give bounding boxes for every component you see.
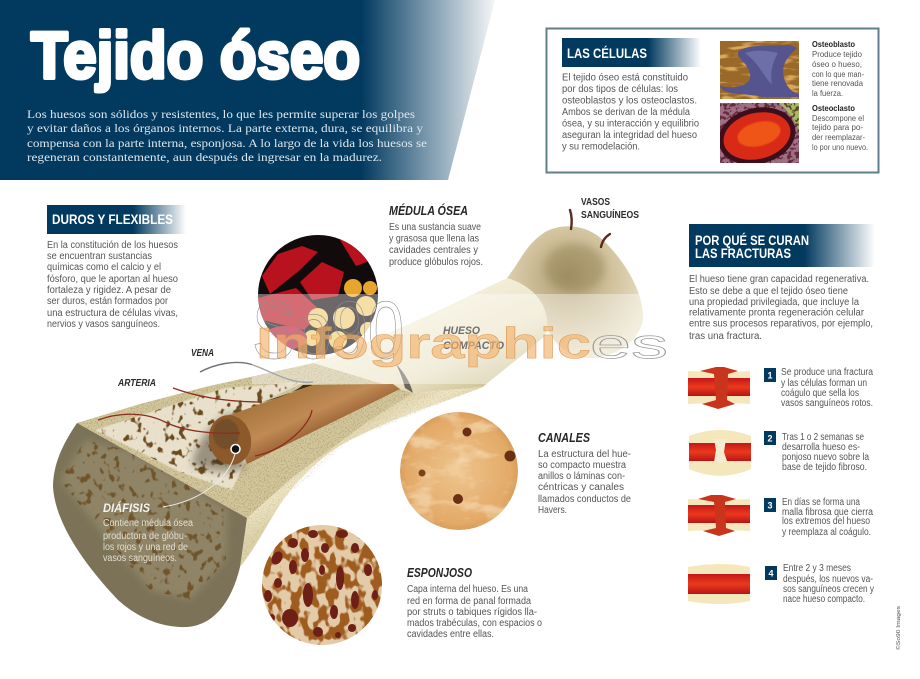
text: osteoclasto: Osteoclasto xyxy=(812,104,855,113)
intro text: Los huesos son sólidos y resistentes, lo que les permite superar los golpes xyxy=(27,109,416,121)
text 4 xyxy=(783,563,874,605)
step 3 xyxy=(688,495,873,538)
image: canales circle xyxy=(400,412,518,530)
callout diáfisis xyxy=(163,444,240,507)
vena xyxy=(200,362,313,382)
text: osteoblasto: la fuerza. xyxy=(812,89,843,98)
number 1 xyxy=(764,368,776,382)
text 1: y las células forman un xyxy=(781,378,867,389)
text: células xyxy=(562,72,700,152)
vasos sanguíneos xyxy=(570,210,610,247)
intro text: y evitar daños a los órganos internos. La parte externa, dura, se equilibra y xyxy=(27,123,423,135)
translucent band xyxy=(252,294,644,384)
watermark: es xyxy=(590,320,668,367)
intro text xyxy=(27,109,427,164)
text: fracturas: entre sus procesos reparativos, por ejemplo, xyxy=(689,318,873,330)
label: diáfisis xyxy=(103,500,193,564)
text 4: sos sanguíneos crecen y xyxy=(783,584,874,595)
text: células: Ambos se derivan de la médula xyxy=(562,107,691,118)
label: hueso compacto xyxy=(443,325,504,352)
label: esponjoso: Capa interna del hueso. Es una xyxy=(407,584,528,595)
text 3: y reemplaza al coágulo. xyxy=(782,527,871,538)
label: canales: Havers. xyxy=(538,505,567,516)
label: médula ósea: produce glóbulos rojos. xyxy=(389,257,483,268)
text: fracturas: El hueso tiene gran capacidad regenerativa. xyxy=(689,274,869,285)
text 1: vasos sanguíneos rotos. xyxy=(781,398,873,409)
dark gap xyxy=(263,385,313,402)
label: esponjoso: mados trabéculas, con espacios o xyxy=(407,618,542,629)
text 1 xyxy=(781,367,873,409)
text: osteoclasto xyxy=(812,104,868,152)
text: fracturas: relativamente pronta regeneración celular xyxy=(689,308,865,318)
label: arteria: ARTERIA xyxy=(117,378,156,389)
heading: fracturas: POR QUÉ SE CURAN xyxy=(695,232,809,248)
label: médula ósea: MÉDULA ÓSEA xyxy=(389,203,468,218)
image: osteoclasto xyxy=(720,103,799,163)
icon: fracture 1 xyxy=(688,367,750,409)
number 3 xyxy=(764,498,776,512)
text: osteoclasto: der reemplazar- xyxy=(812,133,865,142)
curled bone fold xyxy=(396,364,413,393)
icon: fracture 4 xyxy=(688,564,750,604)
text: células: y su remodelación. xyxy=(562,142,640,152)
label: vasos sanguíneos: VASOS xyxy=(581,197,610,208)
step 1 xyxy=(688,367,873,409)
number 3: 3 xyxy=(767,500,773,510)
text: duros y flexibles: ser duros, están formados por xyxy=(47,296,169,307)
number 4 xyxy=(765,566,777,580)
text: osteoblasto: Produce tejido xyxy=(812,50,863,59)
text 3 xyxy=(782,497,873,538)
label: vena: VENA xyxy=(191,348,214,359)
label: canales: llamados conductos de xyxy=(538,494,632,505)
label: hueso compacto: HUESO xyxy=(443,325,480,337)
cut face xyxy=(53,423,247,627)
label: canales xyxy=(538,430,632,516)
text: duros y flexibles: fortaleza y rigidez. A pesar de xyxy=(47,285,172,296)
text: osteoblasto: Osteoblasto xyxy=(812,40,855,49)
text: fracturas: una propiedad privilegiada, que incluye la xyxy=(689,297,860,308)
compact bone tube xyxy=(313,278,547,393)
image: médula ósea circle xyxy=(255,232,381,358)
cylinder end xyxy=(204,411,256,469)
text 4: Entre 2 y 3 meses xyxy=(783,563,851,574)
text: osteoblasto: con lo que man- xyxy=(812,70,864,79)
label: diáfisis: Contiene médula ósea xyxy=(103,518,193,529)
label: canales: anillos o láminas con- xyxy=(538,471,625,482)
text: duros y flexibles xyxy=(47,240,179,330)
head shading xyxy=(545,244,605,292)
text: duros y flexibles: químicas como el calcio y el xyxy=(47,262,161,273)
number 2 xyxy=(764,431,776,445)
label: vasos sanguíneos: SANGUÍNEOS xyxy=(581,208,639,221)
heading: fracturas: LAS FRACTURAS xyxy=(695,245,791,261)
label: diáfisis: los rojos y una red de xyxy=(103,542,188,553)
text: fracturas xyxy=(689,274,873,342)
bone head xyxy=(507,226,643,358)
text: osteoblasto: óseo o hueso, xyxy=(812,60,862,69)
title: Tejido óseo xyxy=(31,18,360,92)
text: células: osteoblastos y los osteoclastos. xyxy=(562,96,697,106)
text: células: por dos tipos de células: los xyxy=(562,84,678,95)
image: osteoblasto xyxy=(720,41,799,99)
text 2: ponjoso nuevo sobre la xyxy=(782,452,869,463)
text 3: los extremos del hueso xyxy=(782,516,870,527)
text: células: ósea, y su interacción y equilibrio xyxy=(562,118,700,130)
text: osteoclasto: tejido para po- xyxy=(812,123,863,132)
image: esponjoso circle xyxy=(262,525,382,645)
text: duros y flexibles: En la constitución de los huesos xyxy=(47,240,178,251)
step 2 xyxy=(689,430,869,476)
top surface xyxy=(77,363,413,518)
intro text: compensa con la parte interna, esponjosa. A lo largo de la vida los huesos se xyxy=(27,138,427,150)
step 4 xyxy=(688,563,874,605)
text: fracturas: tras una fractura. xyxy=(689,331,762,342)
label: diáfisis: DIÁFISIS xyxy=(103,500,150,515)
label: esponjoso xyxy=(407,565,542,640)
text 3: En días se forma una xyxy=(782,497,860,508)
text 2: base de tejido fibroso. xyxy=(782,462,867,473)
credit: ©So90 Images xyxy=(895,606,902,650)
icon: fracture 3 xyxy=(688,495,750,536)
heading: las células: LAS CÉLULAS xyxy=(567,45,647,61)
heading: fracturas xyxy=(689,224,875,267)
text 2: Tras 1 o 2 semanas se xyxy=(782,432,864,443)
text: fracturas: Esto se debe a que el tejido óseo tiene xyxy=(689,286,849,297)
label: canales: so compacto muestra xyxy=(538,460,627,471)
label: médula ósea: Es una sustancia suave xyxy=(389,222,481,233)
label: esponjoso: cavidades entre ellas. xyxy=(407,629,494,640)
number 1: 1 xyxy=(767,370,773,380)
panel: las células xyxy=(546,28,878,173)
text: células: El tejido óseo está constituido xyxy=(562,72,689,84)
header banner xyxy=(0,0,495,180)
watermark xyxy=(252,285,668,376)
icon: fracture 2 xyxy=(689,430,751,476)
text: duros y flexibles: una estructura de células vivas, xyxy=(47,308,178,319)
number 4: 4 xyxy=(768,568,774,578)
text 2 xyxy=(782,432,869,473)
text 1: Se produce una fractura xyxy=(781,367,873,378)
label: diáfisis: productora de glóbu- xyxy=(103,531,187,542)
label: hueso compacto: COMPACTO xyxy=(443,340,504,352)
label: canales: céntricas y canales xyxy=(538,482,624,493)
illustration: bone xyxy=(40,210,643,640)
label: vasos sanguíneos xyxy=(581,197,639,221)
label: médula ósea xyxy=(389,203,483,268)
text 1: coágulo que sella los xyxy=(781,388,859,399)
text 3: malla fibrosa que cierra xyxy=(782,507,873,518)
label: esponjoso: red en forma de panal formada xyxy=(407,596,531,607)
panel: por qué se curan las fracturas xyxy=(688,224,875,605)
watermark: Infographic xyxy=(256,319,591,368)
text: osteoclasto: lo por uno nuevo. xyxy=(812,143,868,152)
number 2: 2 xyxy=(767,434,773,444)
panel: duros y flexibles xyxy=(47,205,186,330)
text 4: después, los nuevos va- xyxy=(783,574,873,585)
label: canales: CANALES xyxy=(538,430,590,445)
label: médula ósea: cavidades centrales y xyxy=(389,245,478,256)
text: osteoblasto: tiene renovada xyxy=(812,79,864,88)
label: médula ósea: y grasosa que llena las xyxy=(389,234,479,244)
label: diáfisis: vasos sanguíneos. xyxy=(103,553,177,564)
text 2: desarrolla hueso es- xyxy=(782,442,860,453)
text: duros y flexibles: nervios y vasos sanguíneos. xyxy=(47,319,160,330)
watermark: So90 xyxy=(252,285,404,376)
label: esponjoso: por struts o tabiques rígidos lla- xyxy=(407,607,537,618)
text: duros y flexibles: fósforo, que le aportan al hueso xyxy=(47,274,179,285)
arteria xyxy=(98,388,312,456)
label: canales: La estructura del hue- xyxy=(538,449,631,460)
text: osteoblasto xyxy=(812,40,864,98)
text 4: nace hueso compacto. xyxy=(783,594,865,605)
label: esponjoso: ESPONJOSO xyxy=(407,565,472,580)
heading: las células xyxy=(562,38,701,67)
heading: duros y flexibles: DUROS Y FLEXIBLES xyxy=(52,211,173,227)
text: células: aseguran la integridad del hueso xyxy=(562,130,698,141)
lower cream strip xyxy=(240,387,483,567)
text: duros y flexibles: se encuentran sustancias xyxy=(47,251,152,262)
intro text: regeneran constantemente, aun después de ingresar en la madurez. xyxy=(27,152,382,164)
text: osteoclasto: Descompone el xyxy=(812,114,864,123)
cylinder of medullary cavity xyxy=(230,384,400,464)
